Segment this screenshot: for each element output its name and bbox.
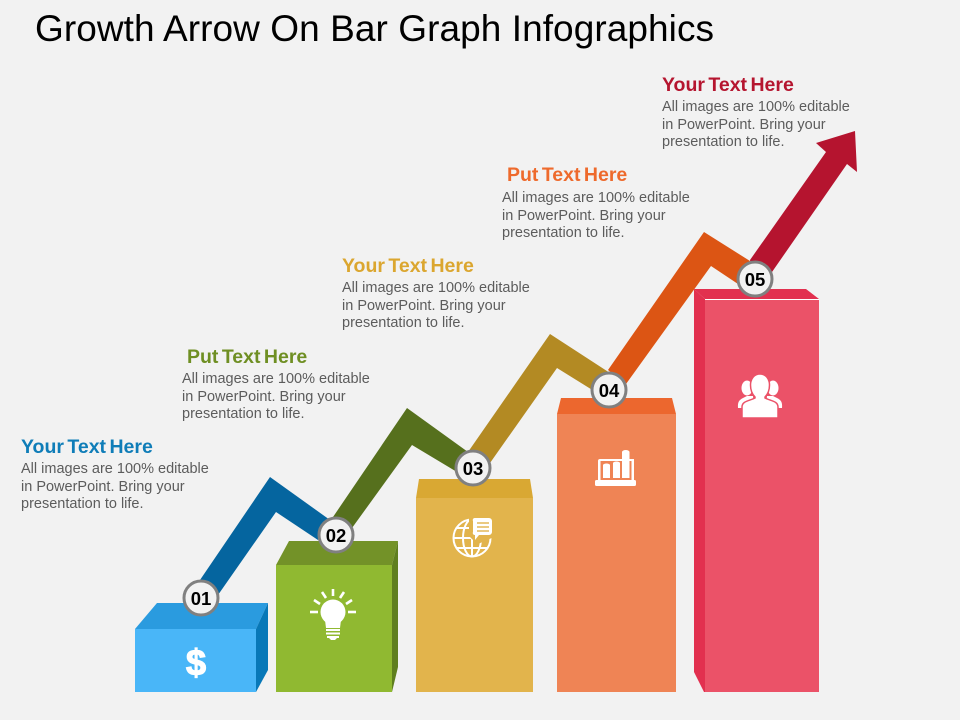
icon: group of people: [738, 374, 782, 418]
text block 1: presentation to life.: [21, 496, 144, 512]
arrow segment: blue: [200, 477, 330, 595]
arrow segment: gold: [468, 334, 610, 463]
icon: laptop with bar chart: [595, 450, 636, 486]
text block 3: Your Text Here: [342, 255, 474, 277]
text block 2: [182, 346, 370, 422]
badge 05: 05: [745, 269, 765, 290]
badge 02: 02: [326, 525, 346, 546]
bar 4: orange: [557, 398, 676, 692]
text block 2: presentation to life.: [182, 406, 305, 422]
text block 3: in PowerPoint. Bring your: [342, 298, 506, 314]
text block 1: in PowerPoint. Bring your: [21, 479, 185, 495]
text block 3: All images are 100% editable: [342, 280, 530, 296]
badge 04: 04: [599, 380, 620, 401]
bar 5: red: [694, 289, 819, 692]
text block 3: presentation to life.: [342, 315, 465, 331]
badge 05: [738, 262, 772, 296]
text block 1: [21, 436, 209, 512]
badge 01: [184, 581, 218, 615]
text block 1: Your Text Here: [21, 436, 153, 458]
icon: dollar: $: [186, 642, 206, 683]
text block 5: [662, 74, 850, 150]
text block 5: in PowerPoint. Bring your: [662, 117, 826, 133]
arrow segment: orange: [608, 232, 750, 384]
badge 01: 01: [191, 588, 211, 609]
text block 1: All images are 100% editable: [21, 461, 209, 477]
text block 5: presentation to life.: [662, 134, 785, 150]
badge 04: [592, 373, 626, 407]
text block 4: All images are 100% editable: [502, 190, 690, 206]
arrow segment: red with head: [750, 131, 857, 285]
text block 2: in PowerPoint. Bring your: [182, 389, 346, 405]
text block 4: [502, 164, 690, 241]
text block 5: All images are 100% editable: [662, 99, 850, 115]
icon: globe with speech bubble: [454, 516, 494, 557]
bar 3: gold: [416, 479, 533, 692]
arrow segment: green: [333, 408, 468, 528]
badge 03: 03: [463, 458, 483, 479]
text block 3: [342, 255, 530, 331]
text block 2: All images are 100% editable: [182, 371, 370, 387]
bar 1: blue: [135, 603, 268, 692]
badge 02: [319, 518, 353, 552]
text block 4: Put Text Here: [507, 164, 627, 186]
bar 2: green: [276, 541, 398, 692]
text block 4: in PowerPoint. Bring your: [502, 208, 666, 224]
text block 5: Your Text Here: [662, 74, 794, 96]
icon: light bulb: [310, 589, 356, 640]
title: Growth Arrow On Bar Graph Infographics: [35, 8, 714, 49]
text block 4: presentation to life.: [502, 225, 625, 241]
text block 2: Put Text Here: [187, 346, 307, 368]
badge 03: [456, 451, 490, 485]
